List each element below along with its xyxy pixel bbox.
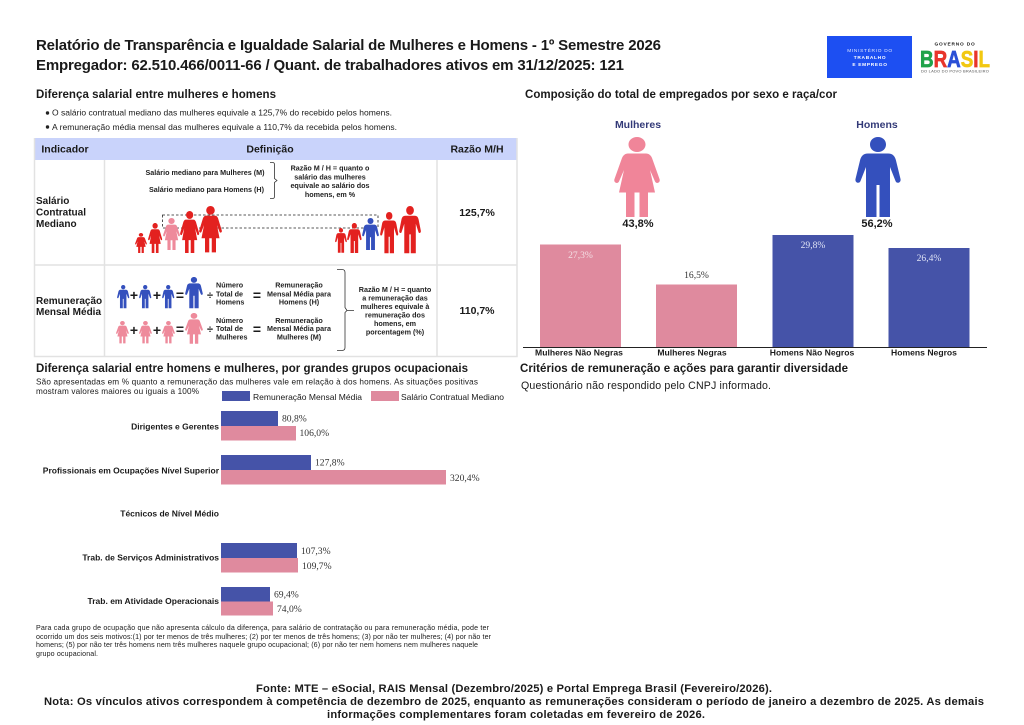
legend: Remuneração Mensal Média <box>253 392 362 402</box>
row: Remuneração Mensal Média <box>36 270 495 350</box>
panel: composition by sex and race <box>523 89 987 358</box>
ratio explanation: equivale ao salário dos <box>290 181 370 190</box>
logo: Governo do Brasil: BRASIL <box>920 46 990 72</box>
formula: women: = <box>253 321 261 337</box>
bar chart: composition: Mulheres Negras <box>657 348 727 358</box>
ratio explanation <box>359 285 432 336</box>
bullet points: A remuneração média mensal das mulheres equivale a 110,7% da recebida pelos homens. <box>52 122 397 132</box>
legend <box>222 391 504 402</box>
icon: women 43,8% <box>614 119 661 230</box>
legend: Salário Contratual Mediano <box>401 392 504 402</box>
row: Remuneração Mensal Média: Remuneração <box>36 296 102 307</box>
header title: Empregador: 62.510.466/0011-66 / Quant. de trabalhadores ativos em 31/12/2025: 121 <box>36 57 624 74</box>
formula: women: = <box>176 321 184 337</box>
bar chart: occupational groups: 80,8% <box>282 414 307 424</box>
description: mostram valores maiores ou iguais a 100% <box>36 387 199 396</box>
bar chart: composition: 29,8% <box>801 240 825 251</box>
heading: occupational groups: Diferença salarial entre homens e mulheres, por grandes grupos ocupacionais <box>36 363 468 375</box>
icons: women family <box>135 206 222 253</box>
bullet points <box>46 108 397 132</box>
source and note <box>44 683 984 721</box>
bar chart: composition: 26,4% <box>917 253 941 264</box>
bar chart: occupational groups: Trab. de Serviços Administrativos <box>82 552 219 562</box>
bracket <box>337 270 354 350</box>
formula: men: Homens (H) <box>279 298 320 306</box>
row: Salário Contratual Mediano: Salário <box>36 196 69 207</box>
bar chart: composition: Homens Negros <box>891 348 957 358</box>
footnote: homens; (5) por não ter três homens nem três mulheres naquele grupo ocupacional; (6) por não ter nem homens nem mulheres naquele <box>36 641 478 649</box>
formula: women: + <box>130 322 138 338</box>
formula: women: Total de <box>216 324 243 333</box>
panel: salary difference <box>34 89 517 356</box>
formula: men: Total de <box>216 290 243 298</box>
bracket <box>270 162 277 198</box>
table header: Razão M/H <box>450 144 504 156</box>
ratio explanation <box>290 164 370 199</box>
formula: men: = <box>253 287 261 303</box>
definition labels: Salário mediano para Mulheres (M) <box>145 168 265 177</box>
formula: men: Mensal Média para <box>267 290 332 298</box>
table header <box>34 138 517 160</box>
table grid <box>34 138 517 356</box>
formula: women: + <box>153 322 161 338</box>
icon: men 56,2%: Homens <box>856 119 898 131</box>
footnote: ocorrido um dos seis motivos:(1) por ter menos de três mulheres; (2) por ter menos de três homens; (3) por não ter mulheres; (4) por não ter <box>36 633 492 641</box>
definition labels <box>145 168 265 194</box>
header title: Relatório de Transparência e Igualdade Salarial de Mulheres e Homens - 1º Semestre 2026 <box>36 37 661 54</box>
bar chart: occupational groups: 320,4% <box>450 473 480 484</box>
value 110,7%: 110,7% <box>459 305 495 317</box>
bar chart: composition: Homens Não Negros <box>770 348 854 358</box>
description: São apresentadas em % quanto a remuneração das mulheres vale em relação à dos homens. As situações positivas <box>36 378 478 386</box>
row: Salário Contratual Mediano: Mediano <box>36 219 77 230</box>
bar chart: occupational groups: 69,4% <box>274 590 299 600</box>
logo: Governo do Brasil: GOVERNO DO <box>934 42 976 48</box>
row: Salário Contratual Mediano <box>36 162 495 253</box>
panel: diversity criteria <box>520 363 848 392</box>
source and note: Fonte: MTE – eSocial, RAIS Mensal (Dezembro/2025) e Portal Emprega Brasil (Fevereiro/2026). <box>256 683 772 695</box>
formula: men: + <box>153 287 161 303</box>
bar chart: occupational groups: Técnicos de Nível Médio <box>120 508 219 518</box>
bullet points: O salário contratual mediano das mulheres equivale a 125,7% do recebido pelos homens. <box>52 108 392 118</box>
icon: men 56,2% <box>855 119 901 230</box>
icon: women 43,8%: 43,8% <box>622 218 654 230</box>
footnote: grupo ocupacional. <box>36 650 98 658</box>
ratio explanation: remuneração dos <box>365 310 425 320</box>
logo: Ministério do Trabalho e Emprego: MINISTÉRIO DO <box>847 47 893 54</box>
bar chart: composition: 16,5% <box>684 270 709 281</box>
ratio explanation: homens, em <box>374 319 416 328</box>
description <box>36 378 478 396</box>
source and note: informações complementares foram coletadas em fevereiro de 2026. <box>327 709 705 721</box>
ratio explanation: Razão M / H = quanto <box>359 285 432 294</box>
row: Salário Contratual Mediano: Contratual <box>36 208 86 218</box>
bar chart: composition: 27,3% <box>568 250 593 261</box>
heading: salary difference: Diferença salarial entre mulheres e homens <box>36 89 276 101</box>
ratio explanation: homens, em % <box>305 190 356 199</box>
logo: Ministério do Trabalho e Emprego: E EMPREGO <box>852 62 888 68</box>
panel: occupational groups <box>36 363 504 658</box>
bar chart: occupational groups: Profissionais em Ocupações Nível Superior <box>43 466 220 476</box>
formula: men: Homens <box>216 298 244 306</box>
icons: men family <box>335 206 421 253</box>
source and note: Nota: Os vínculos ativos correspondem à competência de dezembro de 2025, enquanto as remunerações consideram o período de janeiro a dezembro de 2025. As demais <box>44 696 984 708</box>
bar chart: occupational groups: Dirigentes e Gerentes <box>131 422 219 432</box>
bar chart: occupational groups: 107,3% <box>301 546 331 557</box>
formula: women: Mensal Média para <box>267 324 332 333</box>
formula: men: = <box>176 287 184 303</box>
formula: men <box>117 277 332 308</box>
ratio explanation: a remuneração das <box>362 294 428 302</box>
formula: women: Mulheres <box>216 332 248 342</box>
icon: men 56,2%: 56,2% <box>861 218 893 230</box>
logo: Governo do Brasil: DO LADO DO POVO BRASILEIRO <box>921 68 989 74</box>
dashed comparison box <box>162 215 378 228</box>
ratio explanation: Razão M / H = quanto o <box>291 164 370 172</box>
bar chart: occupational groups <box>43 411 480 616</box>
formula: women <box>116 313 332 344</box>
bar chart: occupational groups: 109,7% <box>302 561 332 572</box>
formula: women: Mulheres (M) <box>277 332 322 342</box>
bar chart: occupational groups: Trab. em Atividade Operacionais <box>88 596 219 606</box>
panel: diversity criteria: Questionário não respondido pelo CNPJ informado. <box>521 380 771 392</box>
formula: women: Número <box>216 316 244 325</box>
bar chart: composition: Mulheres Não Negras <box>535 348 623 358</box>
logo: Ministério do Trabalho e Emprego: TRABALHO <box>854 55 886 61</box>
bar chart: composition <box>523 235 987 358</box>
row: Remuneração Mensal Média: Mensal Média <box>36 307 101 318</box>
logo: Ministério do Trabalho e Emprego <box>827 36 912 78</box>
ratio explanation: mulheres equivale à <box>361 302 430 311</box>
formula: men: + <box>130 287 138 303</box>
formula: men: ÷ <box>207 290 213 302</box>
table header: Definição <box>246 144 294 156</box>
ratio explanation: porcentagem (%) <box>366 328 425 336</box>
bar chart: occupational groups: 106,0% <box>300 428 329 439</box>
panel: diversity criteria: Critérios de remuneração e ações para garantir diversidade <box>520 363 848 375</box>
header title <box>36 37 661 74</box>
formula: men: Número <box>216 280 244 290</box>
footnote: Para cada grupo de ocupação que não apresenta cálculo da diferença, para salário de contratação ou para remuneração média, pode ter <box>36 624 490 632</box>
formula: women: Remuneração <box>275 316 323 325</box>
icon: women 43,8%: Mulheres <box>615 119 661 131</box>
footnote <box>36 624 492 658</box>
ratio explanation: salário das mulheres <box>294 172 366 182</box>
bar chart: occupational groups: 127,8% <box>315 458 345 468</box>
table header: Indicador <box>41 144 89 156</box>
heading: composition: Composição do total de empregados por sexo e raça/cor <box>525 89 838 101</box>
bar chart: occupational groups: 74,0% <box>277 604 302 615</box>
value 125,7%: 125,7% <box>459 207 495 219</box>
definition labels: Salário mediano para Homens (H) <box>149 185 265 194</box>
formula: women: ÷ <box>207 324 213 336</box>
formula: men: Remuneração <box>275 280 323 290</box>
